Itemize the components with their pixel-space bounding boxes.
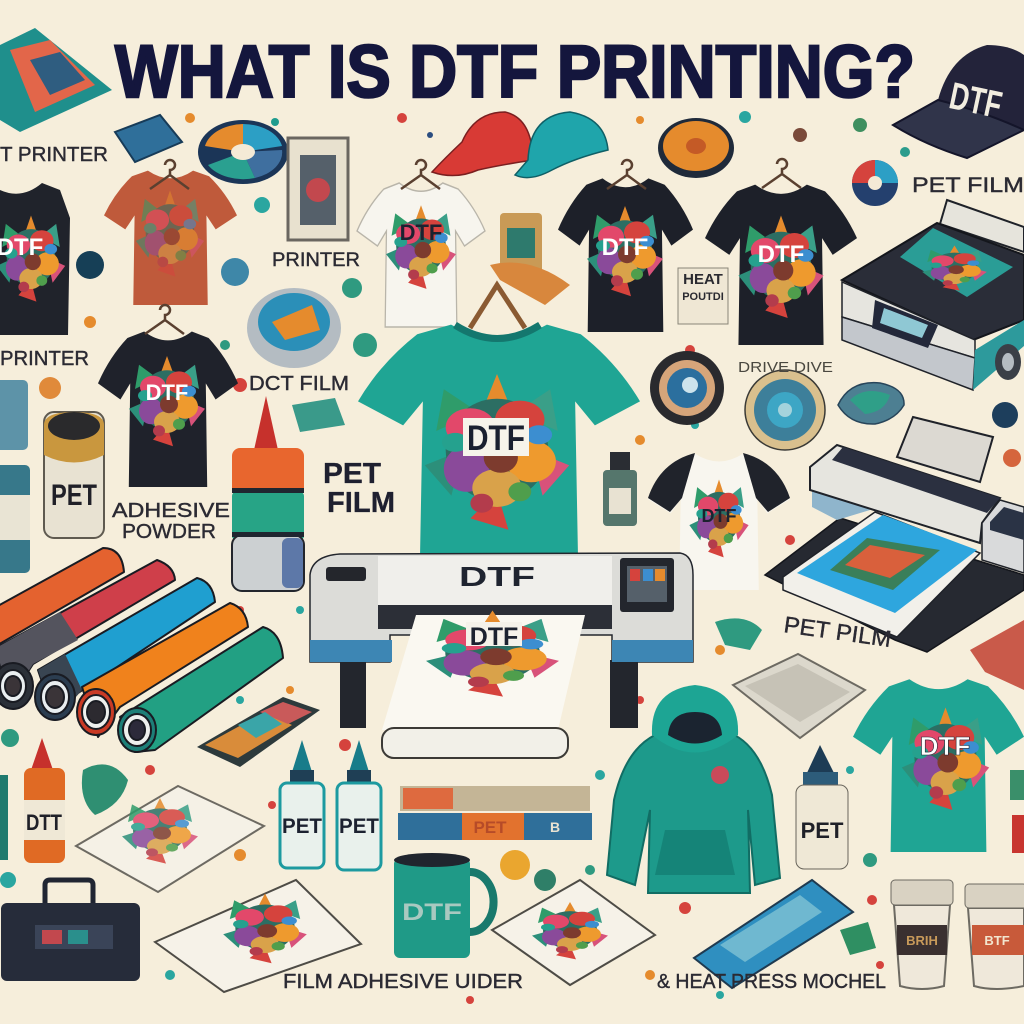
label: printer: PRINTER xyxy=(272,250,360,271)
t-shirt: black centre top: DTF xyxy=(602,234,648,261)
icon: heat press label card xyxy=(678,268,728,324)
icon: PET jar: PET xyxy=(51,479,97,512)
icon: printed sheet left xyxy=(76,786,264,892)
icon: green cloth xyxy=(82,764,128,815)
hangers on shirts xyxy=(145,159,801,334)
printer: centre DTF: DTF xyxy=(470,623,518,651)
t-shirt: red xyxy=(104,171,237,305)
icon: printed sheet centre left xyxy=(155,880,361,992)
icon: printed sheet centre xyxy=(492,880,655,985)
roll: green xyxy=(118,627,283,752)
icon: colour swatch strip xyxy=(197,697,320,767)
icon: teal hoodie xyxy=(607,685,780,893)
icon: teal cap xyxy=(515,112,608,178)
icon: PET bottle right xyxy=(796,745,848,869)
icon: teal block xyxy=(292,398,345,432)
icon: edge bottles left xyxy=(0,738,65,863)
t-shirt: teal right: DTF xyxy=(920,731,970,761)
t-shirt: centre teal hero xyxy=(358,285,640,555)
icon: PET jar xyxy=(44,412,104,538)
label: PET film top: PET FILM xyxy=(912,174,1024,197)
icon: small ink bottle xyxy=(603,452,637,526)
icon: blue pack xyxy=(115,115,182,162)
roll: blue xyxy=(35,578,215,720)
label: PET film centre: PET xyxy=(323,458,381,490)
icon: framed print xyxy=(288,138,348,240)
label: printer left: PRINTER xyxy=(0,348,89,370)
icon: PET bottle 1: PET xyxy=(282,815,322,838)
icon: PET bottle 2: PET xyxy=(339,815,379,838)
t-shirt: black right top xyxy=(705,185,857,345)
icon: PET bottle 2 xyxy=(337,740,381,870)
t-shirt: white xyxy=(357,183,485,327)
icon: black case xyxy=(1,880,140,981)
icon: coffee cup left xyxy=(891,880,953,989)
label: PET pilm: PET PILM xyxy=(782,611,893,652)
caption: bottom right: & HEAT PRESS MOCHEL xyxy=(657,971,886,993)
printer: centre DTF: DTF xyxy=(459,561,535,592)
icon: small colour disc xyxy=(852,160,898,206)
icon: coffee cup left: BRIH xyxy=(906,933,938,948)
icon: left side bottles xyxy=(0,380,30,573)
icon: heat press label card: HEAT xyxy=(683,271,723,288)
icon: red cap xyxy=(432,112,533,176)
icon: folded film top left xyxy=(0,28,112,132)
t-shirt: raglan xyxy=(648,453,790,590)
icon: colour wheel xyxy=(198,120,288,184)
icon: coffee cup right xyxy=(965,884,1024,989)
icon: green bottle tip xyxy=(840,922,876,955)
roll: orange light xyxy=(77,603,248,737)
t-shirt: raglan: DTF xyxy=(702,506,736,526)
icon: colour strip labels: PET xyxy=(473,818,507,837)
right edge items xyxy=(1010,770,1024,853)
printer: centre DTF xyxy=(310,553,693,758)
icon: coffee cup right: BTF xyxy=(984,933,1010,948)
label: DCT film: DCT FILM xyxy=(249,373,349,395)
icon: ink bottle small xyxy=(490,213,570,305)
printer: top right xyxy=(842,200,1024,390)
t-shirt: black right top: DTF xyxy=(758,241,804,268)
label: adhesive powder xyxy=(112,500,230,543)
label: drive: DRIVE DIVE xyxy=(738,359,833,376)
icon: round tape disc xyxy=(247,288,341,368)
t-shirt: black centre top xyxy=(558,178,693,332)
t-shirt: black left middle: DTF xyxy=(146,380,188,405)
icon: DTF mug xyxy=(394,853,494,958)
icon: blue swirl disc xyxy=(745,370,825,450)
title: WHAT IS DTF PRINTING? xyxy=(115,30,915,113)
printer: heat press right xyxy=(765,417,1024,652)
t-shirt: white: DTF xyxy=(400,220,442,245)
icon: colour strip labels: B xyxy=(550,819,560,835)
t-shirt: centre teal hero: DTF xyxy=(467,419,525,458)
roll: red xyxy=(0,560,175,709)
icon: right edge roll xyxy=(970,620,1024,690)
icon: edge bottles left: DTT xyxy=(26,810,62,835)
t-shirt: black left middle xyxy=(98,331,238,487)
label: PET film centre xyxy=(323,458,395,519)
t-shirt: black left xyxy=(0,183,70,335)
icon: teal blob xyxy=(838,383,904,424)
label: adhesive powder: POWDER xyxy=(122,521,216,543)
icon: heat press label card: POUTDI xyxy=(682,291,724,303)
icon: black DTF cap xyxy=(893,45,1024,158)
icon: colour strip labels xyxy=(398,786,592,840)
icon: stacked adhesive bottle xyxy=(232,396,304,591)
icon: teal fabric xyxy=(715,618,762,650)
rolls of coloured film xyxy=(0,548,283,752)
icon: film pack xyxy=(733,654,865,738)
icon: DTF mug: DTF xyxy=(402,899,462,926)
label: adhesive powder: ADHESIVE xyxy=(112,500,230,522)
icon: orange disc xyxy=(658,118,734,178)
roll: orange xyxy=(0,548,124,646)
label: PET printer: T PRINTER xyxy=(0,144,108,166)
icon: PET bottle right: PET xyxy=(801,818,844,843)
icon: dark lens xyxy=(650,351,724,425)
t-shirt: teal right xyxy=(853,679,1024,852)
caption: bottom left: FILM ADHESIVE UIDER xyxy=(283,971,523,993)
label: PET film centre: FILM xyxy=(327,487,395,519)
icon: blue sheet right xyxy=(694,880,853,988)
icon: PET bottle 1 xyxy=(280,740,324,868)
